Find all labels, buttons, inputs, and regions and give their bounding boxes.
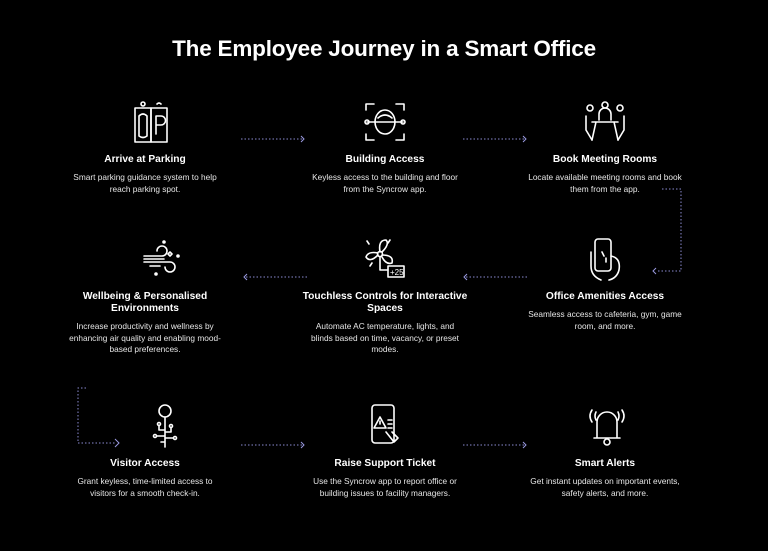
icon: bell [589,409,625,446]
card: Smart Alerts: Get instant updates on important events, [530,476,680,486]
card: Visitor Access: visitors for a smooth check-in. [90,488,200,498]
icon: key [152,404,178,448]
card: Touchless Controls: Automate AC temperature, lights, and [316,321,454,331]
arrow 2 [463,136,527,142]
card: Book Meeting Rooms [528,154,682,194]
card: Wellbeing: based preferences. [109,344,181,354]
arrow: left connector [78,388,120,448]
icon: wind [143,240,180,276]
card: Touchless Controls: Touchless Controls for Interactive [303,291,467,302]
card: Wellbeing: Increase productivity and wellness by [76,321,214,331]
card: Arrive at Parking: Smart parking guidance system to help [73,172,217,182]
arrow: right connector [652,188,682,274]
card: Arrive at Parking: reach parking spot. [110,184,180,194]
card: Visitor Access: Grant keyless, time-limited access to [77,476,213,486]
card: Wellbeing: Wellbeing & Personalised [83,291,207,302]
card: Raise Support Ticket: Use the Syncrow app to report office or [313,476,457,486]
card: Office Amenities Access: room, and more. [575,320,635,330]
card: Smart Alerts [530,458,680,498]
card: Raise Support Ticket: Raise Support Ticket [334,458,436,469]
card: Book Meeting Rooms: Book Meeting Rooms [553,154,657,165]
card: Arrive at Parking [73,154,217,194]
arrow 5 [241,442,305,448]
icon: meeting [585,101,625,141]
arrow 4 (left) [243,274,307,280]
icon: parking [134,101,168,143]
icon: phone hand [590,238,620,281]
card: Book Meeting Rooms: them from the app. [570,184,640,194]
icon: fan [365,239,405,278]
icon: ticket [371,404,399,444]
card: Book Meeting Rooms: Locate available meeting rooms and book [528,172,682,182]
card: Office Amenities Access: Seamless access to cafeteria, gym, game [528,309,682,319]
card: Building Access: Keyless access to the building and floor [312,172,458,182]
card: Wellbeing: Environments [111,303,179,314]
card: Office Amenities Access [528,291,682,330]
card: Smart Alerts: safety alerts, and more. [562,488,648,498]
arrow 3 (left) [463,274,527,280]
card: Visitor Access: Visitor Access [110,458,180,469]
arrow 6 [463,442,527,448]
card: Raise Support Ticket [313,458,457,498]
card: Building Access: Building Access [346,154,424,165]
card: Wellbeing: enhancing air quality and enabling mood- [69,332,221,342]
card: Arrive at Parking: Arrive at Parking [104,154,186,165]
card: Visitor Access [77,458,213,498]
card: Wellbeing [69,291,221,354]
title: The Employee Journey in a Smart Office [172,36,596,61]
card: Building Access: from the Syncrow app. [343,184,426,194]
card: Raise Support Ticket: building issues to facility managers. [320,488,450,498]
card: Office Amenities Access: Office Amenities Access [546,291,664,302]
card: Touchless Controls: modes. [371,344,399,354]
icon: fan: +25 [390,268,404,277]
card: Touchless Controls: Spaces [367,303,403,314]
arrow 1 [241,136,305,142]
card: Building Access [312,154,458,194]
card: Smart Alerts: Smart Alerts [575,458,635,469]
card: Touchless Controls: blinds based on time, vacancy, or preset [311,332,459,342]
icon: face scan [364,103,406,141]
card: Touchless Controls [302,291,467,354]
